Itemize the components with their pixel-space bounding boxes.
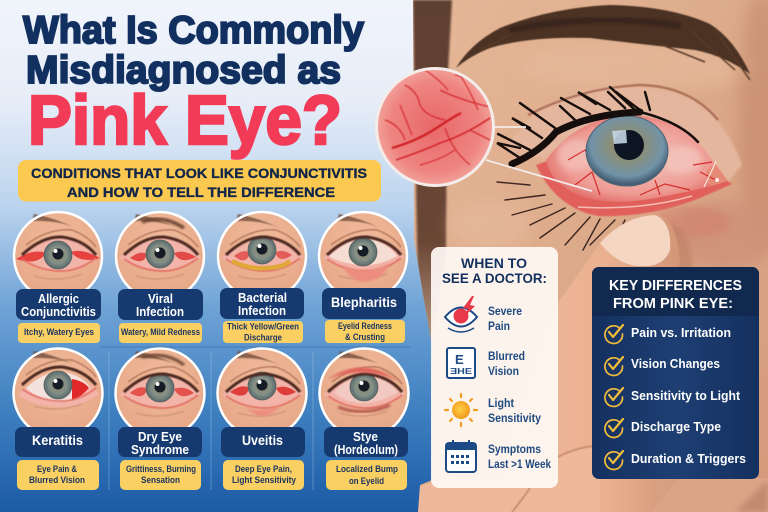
icon: eye with pain bolt — [445, 296, 477, 332]
card: stye hordeolum: on Eyelid — [349, 476, 384, 487]
card: keratitis: Keratitis — [32, 433, 83, 448]
card: allergic conjunctivitis: Itchy, Watery Eyes — [24, 327, 94, 338]
eye photo — [14, 212, 102, 300]
eyebrow — [456, 5, 750, 80]
card: dry eye syndrome: Grittiness, Burning — [126, 464, 196, 475]
card: blepharitis: Eyelid Redness — [338, 321, 392, 332]
eye photo — [320, 348, 408, 438]
upper lid — [505, 86, 742, 182]
card: blepharitis — [319, 212, 407, 343]
card: blepharitis: Blepharitis — [331, 295, 397, 310]
card: bacterial infection: Infection — [238, 303, 286, 318]
card: keratitis: Blurred Vision — [29, 475, 85, 486]
grid divider — [100, 347, 410, 490]
photo: close-up of a red eye with finger pulling the lid — [410, 0, 768, 512]
title line 2: Misdiagnosed as — [26, 49, 341, 92]
card: allergic conjunctivitis — [14, 212, 102, 343]
item: sensitivity to light — [605, 388, 741, 406]
item: discharge type — [605, 419, 721, 437]
panel: when to see a doctor: SEE A DOCTOR: — [442, 270, 547, 286]
item: vision changes: Vision Changes — [631, 357, 720, 371]
item: pain vs irritation: Pain vs. Irritation — [631, 326, 731, 340]
text: light sensitivity: Sensitivity — [488, 413, 542, 425]
text: blurred vision: Blurred — [488, 351, 525, 363]
card: bacterial infection: Bacterial — [238, 290, 287, 305]
shadow around fingertip — [672, 226, 693, 267]
card: bacterial infection: Discharge — [244, 332, 282, 344]
card: stye hordeolum — [320, 348, 408, 490]
card: stye hordeolum: (Hordeolum) — [334, 442, 398, 457]
card: dry eye syndrome — [116, 348, 204, 490]
text: blurred vision: Vision — [488, 366, 519, 378]
card: bacterial infection: Thick Yellow/Green — [227, 322, 299, 332]
icon: eye chart: E — [455, 352, 464, 367]
item: pain vs irritation — [605, 325, 731, 343]
fingertip — [558, 215, 680, 512]
card: allergic conjunctivitis: Allergic — [38, 291, 79, 306]
title — [23, 9, 364, 159]
panel: key differences from pink eye — [592, 267, 759, 479]
hand and lower fingers — [418, 446, 768, 512]
card: uveitis — [218, 348, 306, 490]
eye photo — [218, 348, 306, 438]
subtitle banner — [18, 160, 381, 202]
text: severe pain — [488, 306, 522, 333]
card: viral infection — [116, 212, 204, 343]
sclera — [546, 115, 728, 202]
subtitle banner: AND HOW TO TELL THE DIFFERENCE — [67, 185, 335, 200]
item: discharge type: Discharge Type — [631, 420, 721, 434]
magnifier: blood vessels close-up — [376, 68, 494, 186]
card: bacterial infection — [218, 212, 306, 344]
eye photo — [116, 212, 204, 300]
icon: eye chart: ƎHE — [450, 367, 473, 376]
text: blurred vision — [488, 351, 525, 378]
card: stye hordeolum: Localized Bump — [336, 464, 398, 475]
card: allergic conjunctivitis: Conjunctivitis — [21, 304, 96, 319]
icon: calendar — [446, 440, 476, 472]
card: uveitis: Light Sensitivity — [232, 475, 297, 486]
item: sensitivity to light: Sensitivity to Light — [631, 389, 741, 403]
nail — [600, 215, 670, 266]
card: uveitis: Deep Eye Pain, — [235, 464, 292, 475]
connector lines from magnifier — [486, 127, 592, 191]
card: dry eye syndrome: Dry Eye — [138, 429, 182, 444]
card: stye hordeolum: Stye — [353, 429, 378, 444]
hair strand — [413, 0, 452, 345]
text: symptoms last over one week — [488, 444, 552, 471]
face skin — [410, 0, 768, 512]
tear duct highlight — [704, 161, 716, 187]
subtitle banner: CONDITIONS THAT LOOK LIKE CONJUNCTIVITIS — [31, 166, 367, 181]
panel: key differences from pink eye: FROM PINK EYE: — [613, 296, 733, 312]
card: viral infection: Viral — [148, 291, 173, 306]
eye photo — [218, 212, 306, 300]
upper eyelashes — [497, 87, 698, 164]
eye photo — [319, 212, 407, 300]
text: light sensitivity — [488, 398, 542, 425]
eye photo — [116, 348, 204, 438]
card: viral infection: Infection — [136, 304, 184, 319]
lower lid and waterline — [536, 160, 732, 216]
lower eyelashes — [496, 181, 626, 251]
card: keratitis: Eye Pain & — [37, 464, 77, 475]
text: symptoms last over one week: Last >1 Week — [488, 459, 552, 471]
card: dry eye syndrome: Sensation — [141, 475, 180, 486]
item: vision changes — [605, 357, 720, 375]
panel: when to see a doctor: WHEN TO — [461, 255, 527, 271]
panel: when to see a doctor — [431, 247, 558, 488]
panel: key differences from pink eye: KEY DIFFERENCES — [609, 278, 742, 294]
card: blepharitis: & Crusting — [345, 332, 385, 343]
text: light sensitivity: Light — [488, 398, 514, 410]
text: severe pain: Severe — [488, 306, 522, 318]
icon: eye chart — [447, 348, 475, 378]
iris — [586, 116, 668, 186]
eye photo — [14, 348, 102, 438]
card: viral infection: Watery, Mild Redness — [121, 327, 200, 338]
item: duration and triggers — [605, 451, 746, 469]
card: dry eye syndrome: Syndrome — [131, 442, 189, 457]
title line 3: Pink Eye? — [28, 81, 342, 159]
soft shading on the face — [450, 0, 768, 270]
icon: sun — [445, 394, 477, 426]
card: keratitis — [14, 348, 102, 490]
text: symptoms last over one week: Symptoms — [488, 444, 541, 456]
title line 1: What Is Commonly — [23, 9, 364, 52]
item: duration and triggers: Duration & Triggers — [631, 452, 746, 466]
card: uveitis: Uveitis — [242, 433, 283, 448]
inner corner — [557, 116, 730, 195]
text: severe pain: Pain — [488, 321, 510, 333]
